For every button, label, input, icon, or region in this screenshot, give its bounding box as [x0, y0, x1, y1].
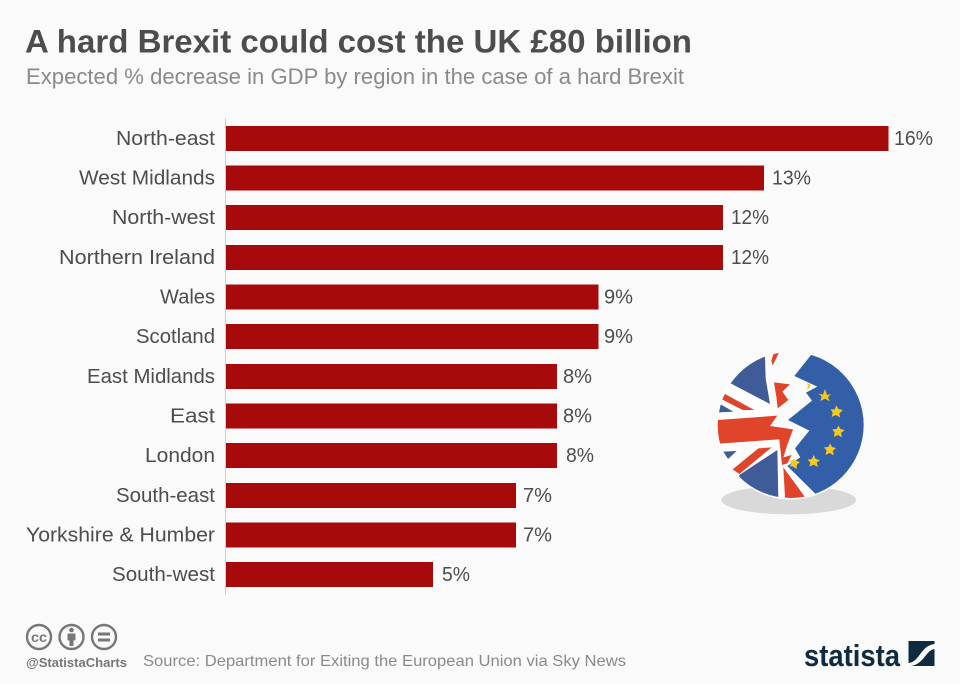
row: South-east 7%: South-east [116, 484, 215, 507]
row: Northern Ireland 12%: 12% [731, 246, 769, 269]
row: Wales 9% [160, 284, 633, 310]
handle: @StatistaCharts [26, 655, 127, 670]
row: East 8%: East [170, 404, 215, 428]
row: Scotland 9% [136, 324, 633, 349]
row: East Midlands 8% [87, 364, 592, 389]
subtitle: Expected % decrease in GDP by region in the case of a hard Brexit [26, 64, 685, 89]
row: North-west 12%: 12% [731, 206, 769, 229]
source: Source: Department for Exiting the European Union via Sky News [143, 653, 626, 670]
row: West Midlands 13% [79, 166, 811, 190]
row: South-west 5% [112, 562, 470, 587]
row: East Midlands 8%: 8% [563, 365, 592, 388]
row: East 8%: 8% [563, 404, 592, 428]
row: Scotland 9%: 9% [604, 325, 633, 348]
bar chart [26, 118, 933, 595]
row: North-east 16% [116, 126, 933, 151]
row: Yorkshire & Humber 7%: Yorkshire & Humber [26, 524, 215, 546]
row: South-west 5%: 5% [442, 563, 470, 586]
row: North-west 12%: North-west [112, 206, 215, 229]
title: A hard Brexit could cost the UK £80 billion [25, 24, 692, 60]
row: East 8% [170, 404, 592, 428]
row: Wales 9%: Wales [160, 286, 215, 308]
row: London 8%: 8% [566, 444, 594, 467]
row: Yorkshire & Humber 7%: 7% [523, 524, 552, 546]
icon: creative commons licence [27, 625, 116, 649]
row: East Midlands 8%: East Midlands [87, 365, 215, 388]
row: South-west 5%: South-west [112, 563, 215, 586]
row: Wales 9%: 9% [604, 286, 633, 308]
icon: attribution person [60, 625, 84, 649]
row: London 8%: London [145, 444, 215, 467]
row: West Midlands 13%: West Midlands [79, 166, 215, 190]
row: Scotland 9%: Scotland [136, 325, 215, 348]
icon: no derivatives equals [92, 625, 116, 649]
row: Northern Ireland 12% [59, 245, 769, 270]
row: Northern Ireland 12%: Northern Ireland [59, 246, 215, 269]
row: North-east 16%: North-east [116, 127, 215, 150]
row: North-west 12% [112, 205, 769, 230]
row: South-east 7%: 7% [523, 484, 552, 507]
icon: statista square [908, 641, 934, 666]
row: West Midlands 13%: 13% [772, 166, 811, 190]
icon: broken UK and EU flag coin [718, 353, 864, 514]
statista logo: statista [804, 638, 901, 673]
row: North-east 16%: 16% [894, 127, 933, 150]
icon: cc: cc [31, 629, 47, 645]
row: London 8% [145, 443, 594, 468]
row: Yorkshire & Humber 7% [26, 522, 552, 548]
row: South-east 7% [116, 483, 552, 508]
